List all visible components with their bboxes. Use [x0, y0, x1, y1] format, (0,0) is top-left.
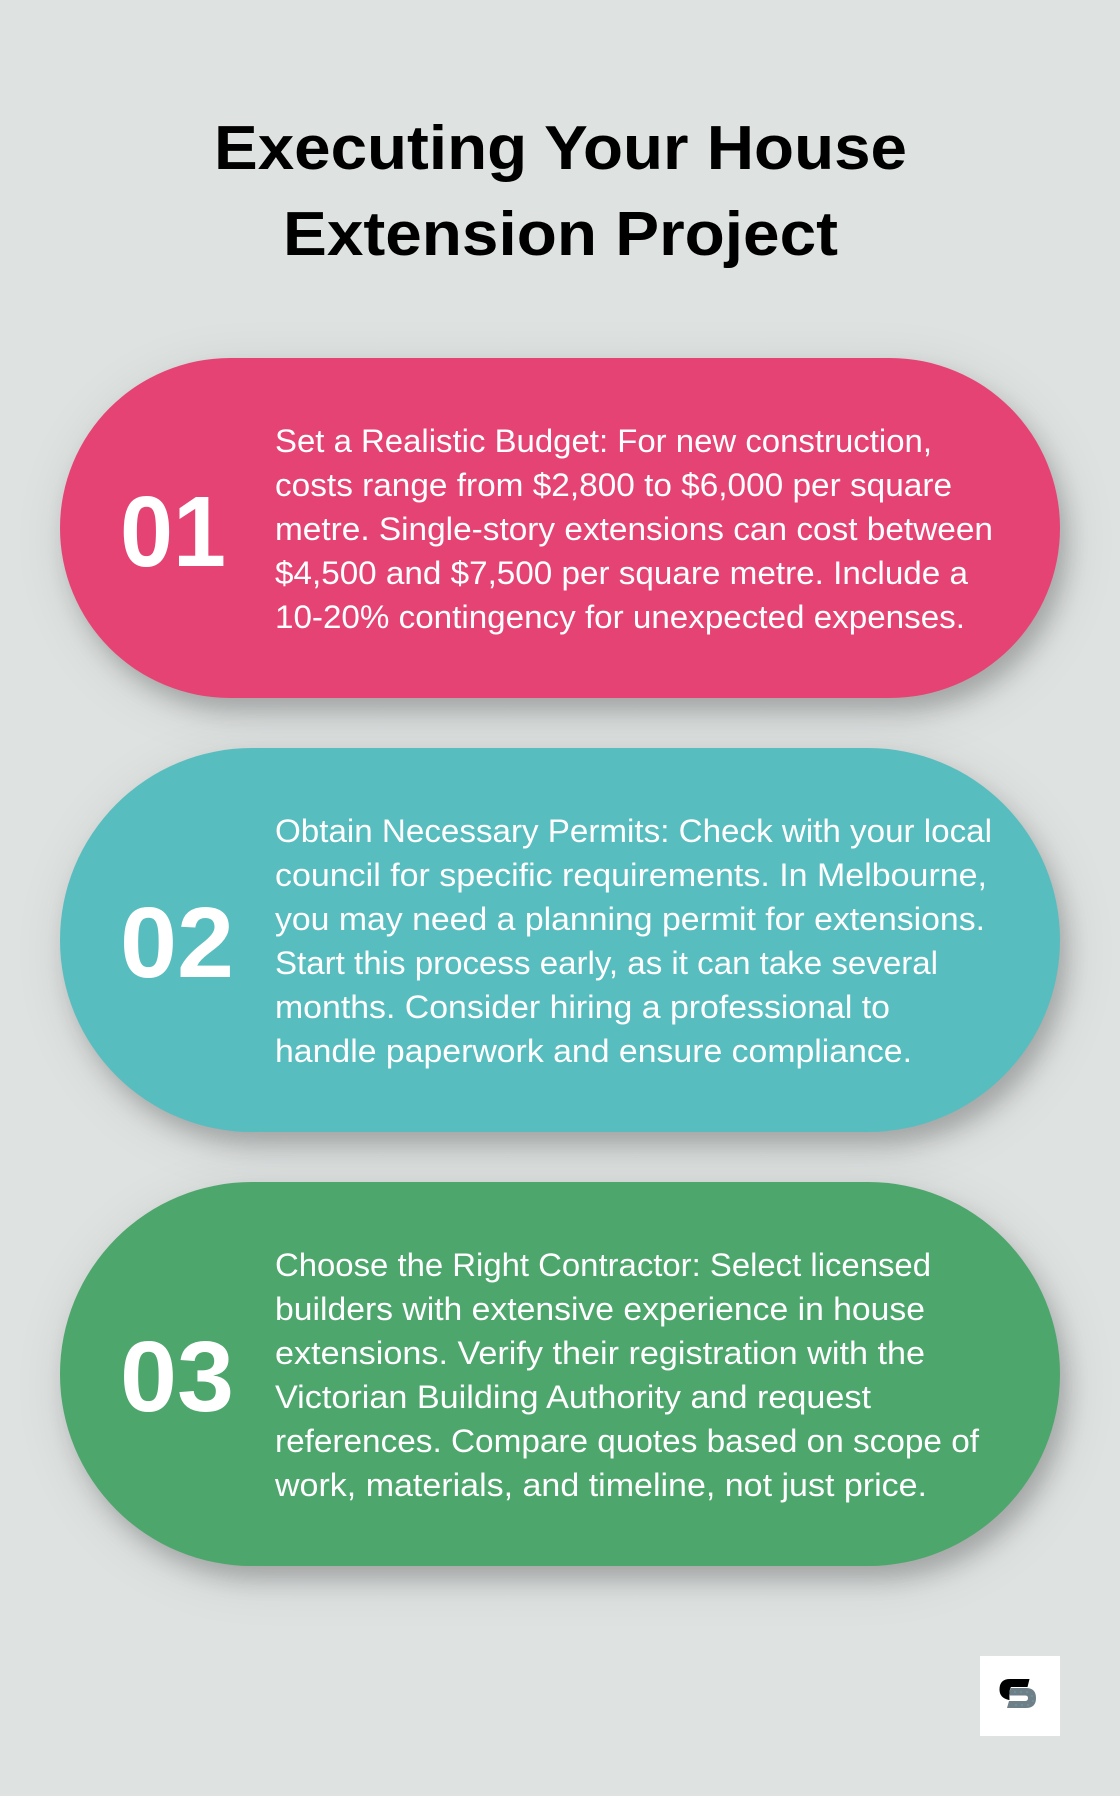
- text block: permits: [275, 813, 992, 1069]
- text block: budget: Set a Realistic Budget: For new construction,: [275, 423, 932, 459]
- text block: permits: months. Consider hiring a professional to: [275, 989, 890, 1025]
- text block: contractor: extensions. Verify their registration with the: [275, 1335, 925, 1371]
- text block: permits: Obtain Necessary Permits: Check with your local: [275, 813, 992, 849]
- text block: budget: metre. Single-story extensions can cost between: [275, 511, 993, 547]
- number 01: 01: [120, 476, 226, 588]
- panel: step 03 choose the right contractor: [60, 1182, 1060, 1566]
- title: Executing Your House: [214, 114, 907, 183]
- text block: budget: costs range from $2,800 to $6,000 per square: [275, 467, 952, 503]
- number 03: 03: [120, 1321, 234, 1433]
- icon: logo badge: [980, 1656, 1060, 1736]
- text block: budget: $4,500 and $7,500 per square metre. Include a: [275, 555, 968, 591]
- text block: contractor: work, materials, and timeline, not just price.: [274, 1467, 927, 1503]
- text block: permits: Start this process early, as it can take several: [275, 945, 938, 981]
- text block: contractor: [274, 1247, 979, 1503]
- title: [214, 114, 907, 269]
- title: Extension Project: [283, 200, 838, 269]
- text block: budget: 10-20% contingency for unexpected expenses.: [275, 599, 965, 635]
- text block: contractor: Victorian Building Authority and request: [275, 1379, 871, 1415]
- text block: contractor: Choose the Right Contractor: Select licensed: [275, 1247, 931, 1283]
- text block: permits: council for specific requirements. In Melbourne,: [275, 857, 987, 893]
- number 02: 02: [120, 887, 234, 999]
- panel: step 01 set a realistic budget: [60, 358, 1060, 698]
- text block: budget: [275, 423, 993, 635]
- panel: step 02 obtain necessary permits: [60, 748, 1060, 1132]
- text block: contractor: references. Compare quotes based on scope of: [275, 1423, 979, 1459]
- text block: permits: handle paperwork and ensure compliance.: [275, 1033, 912, 1069]
- text block: contractor: builders with extensive experience in house: [275, 1291, 925, 1327]
- text block: permits: you may need a planning permit for extensions.: [275, 901, 985, 937]
